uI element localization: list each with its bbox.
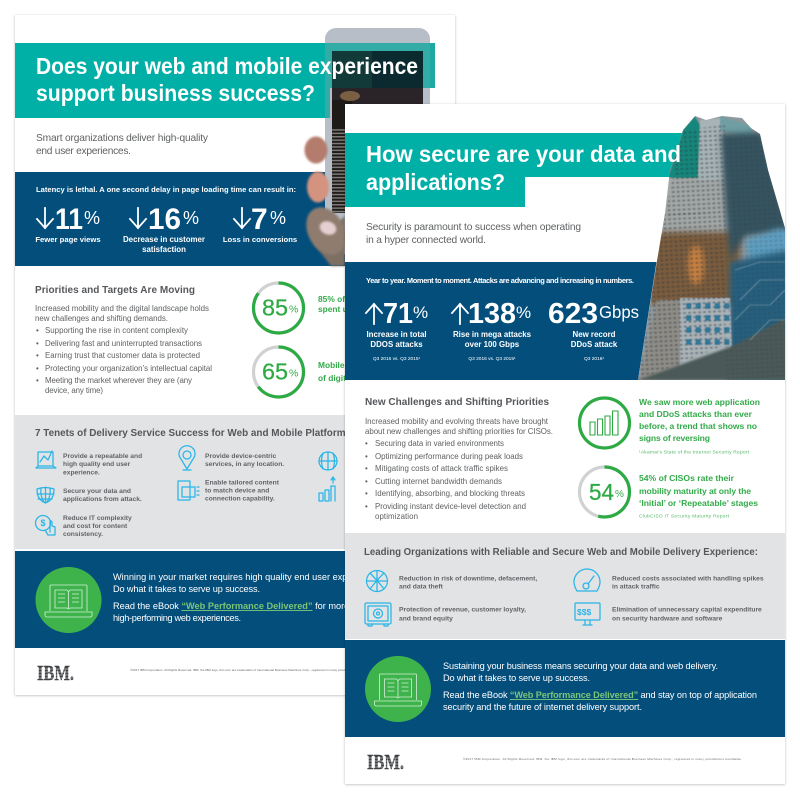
benefit: downtime — [399, 576, 537, 590]
title: Does your web and mobile experience — [36, 53, 418, 79]
stat: 11 percent: Fewer page views — [35, 235, 101, 244]
panel: new challenges: New Challenges and Shifting Priorities — [365, 397, 549, 408]
attack statistics — [366, 276, 639, 362]
priorities body text: Meeting the market wherever they are (any — [45, 376, 192, 385]
priorities body text: new challenges and shifting demands. — [35, 314, 168, 323]
ring captions: 85% of mobile time is — [318, 294, 404, 304]
priorities body text: • — [36, 339, 39, 348]
tenet 1 — [63, 453, 142, 476]
callout: web and DDoS attacks: We saw more web application — [639, 397, 760, 407]
stat: 71 percent: DDOS attacks — [370, 340, 423, 349]
right footer: ©2017 IBM Corporation. All Rights Reserved. IBM, the IBM logo, ibm.com are trademarks of International Business Machines Corp., registered in many jurisdictions worldwide. — [463, 757, 742, 761]
callout: web and DDoS attacks: ¹Akamai’s State of the Internet Security Report — [639, 450, 750, 456]
icon: ebook laptop — [365, 656, 431, 722]
icon: globe devices — [319, 452, 337, 470]
tenet 2: applications from attack. — [63, 496, 142, 503]
icon: speedometer — [574, 569, 600, 591]
challenges body text: Identifying, absorbing, and blocking threats — [375, 489, 525, 498]
icon: dollar hand — [36, 516, 55, 535]
call to action text — [443, 661, 757, 712]
icon: dollar sign: $ — [40, 518, 46, 528]
callout: CISO mobility maturity: ‘Initial’ or ‘Repeatable’ stages — [639, 498, 758, 508]
stat: 7 percent — [223, 203, 297, 244]
challenges body text — [365, 417, 553, 521]
ring: 54 percent: 54 — [589, 479, 614, 505]
priorities body text: Protecting your organization’s intellectual capital — [45, 364, 212, 373]
stat: 623 Gbps: New record — [573, 330, 616, 339]
stat: 16 percent: 16 — [148, 203, 181, 236]
title: support business success? — [36, 80, 315, 106]
ring: 54 percent — [580, 467, 630, 517]
tenet 4 — [205, 453, 284, 468]
stat: 71 percent — [366, 298, 428, 362]
panel: latency statistics — [35, 185, 297, 254]
challenges body text: • — [365, 452, 368, 461]
ring: 65 percent: % — [289, 368, 298, 380]
stat: 623 Gbps: Gbps — [599, 302, 639, 322]
stat: 138 percent: over 100 Gbps — [465, 340, 520, 349]
priorities body text: Increased mobility and the digital landscape holds — [35, 304, 209, 313]
icon: monitor dollars — [575, 603, 600, 625]
challenges body text: • — [365, 439, 368, 448]
callout: web and DDoS attacks — [639, 397, 760, 456]
tenet 2: Secure your data and — [63, 488, 131, 495]
icon: growth bars — [319, 477, 335, 501]
hand holding the phone — [298, 136, 354, 266]
ring: 54 percent: % — [615, 489, 624, 500]
phone photo — [298, 28, 435, 266]
stat: 138 percent: 138 — [468, 298, 516, 330]
tenet 5: connection capability. — [205, 496, 275, 502]
stat: 16 percent: satisfaction — [142, 245, 186, 254]
ring: 85 percent: 85 — [262, 294, 288, 320]
call to action text: Do what it takes to serve up success. — [113, 584, 260, 594]
stat: 623 Gbps — [548, 298, 639, 362]
ring: 65 percent: 65 — [262, 358, 288, 384]
challenges body text: optimization — [375, 512, 418, 521]
callout: CISO mobility maturity: ClubCISO IT Security Maturity Report — [639, 514, 730, 520]
panel: new challenges — [365, 397, 760, 521]
benefit: downtime: Reduction in risk of downtime, defacement, — [399, 576, 537, 582]
tenet 4: Provide device-centric — [205, 453, 277, 460]
title — [36, 53, 418, 106]
benefit: capital expenditure: Elimination of unnecessary capital expenditure — [612, 606, 762, 614]
panel: left infographic page — [15, 15, 455, 695]
challenges body text: Providing instant device-level detection and — [375, 502, 526, 511]
icon: dollar signs: $$$ — [577, 607, 591, 617]
tenet 5 — [205, 480, 280, 502]
intro text — [366, 222, 581, 246]
challenges body text: Optimizing performance during peak loads — [375, 452, 523, 461]
tenet 3: Reduce IT complexity — [63, 515, 132, 522]
benefit: capital expenditure: on security hardware and software — [612, 616, 723, 622]
panel: priorities and targets: Priorities and Targets Are Moving — [35, 285, 195, 296]
tenet 5: Enable tailored content — [205, 480, 280, 486]
call to action text: Sustaining your business means securing your data and web delivery. — [443, 661, 718, 671]
stat: 623 Gbps: DDoS attack — [571, 340, 618, 349]
tenet 3: and cost for content — [63, 523, 128, 530]
latency band background — [15, 172, 345, 266]
building photo — [638, 116, 785, 380]
priorities body text: • — [36, 326, 39, 335]
tenet 1: high quality end user — [63, 461, 131, 468]
stat: 11 percent — [35, 203, 101, 244]
stat: 16 percent — [123, 203, 205, 254]
challenges body text: Mitigating costs of attack traffic spikes — [375, 464, 508, 473]
stat: 623 Gbps: 623 — [548, 298, 598, 330]
tenet 1: experience. — [63, 470, 100, 476]
attack statistics: Year to year. Moment to moment. Attacks are advancing and increasing in numbers. — [366, 276, 634, 285]
priorities body text: • — [36, 364, 39, 373]
stat: 7 percent: % — [270, 208, 286, 228]
challenges body text: Increased mobility and evolving threats have brought — [365, 417, 549, 426]
benefit: costs: Reduced costs associated with handling spikes — [612, 576, 764, 582]
callout: CISO mobility maturity — [639, 473, 758, 520]
left footer: IBM. — [37, 661, 74, 685]
ring: 65 percent — [254, 347, 304, 397]
stat: 71 percent: Q3 2016 vs. Q3 2015¹ — [373, 356, 420, 362]
priorities body text: Earning trust that customer data is protected — [45, 351, 200, 360]
title: applications? — [366, 169, 505, 195]
title band — [15, 43, 435, 118]
challenges body text: • — [365, 477, 368, 486]
title — [366, 141, 681, 195]
ring captions — [318, 294, 404, 383]
panel: latency statistics: Latency is lethal. A one second delay in page loading time can result in: — [36, 185, 296, 194]
stat: 138 percent — [452, 298, 532, 362]
benefit: costs — [612, 576, 764, 590]
left footer — [36, 661, 370, 685]
call to action text — [113, 572, 385, 623]
tenet 3 — [63, 515, 132, 538]
tenet 1: Provide a repeatable and — [63, 453, 142, 460]
stat: 138 percent: % — [516, 303, 531, 322]
stat: 71 percent: Increase in total — [366, 330, 427, 339]
icon: safe — [365, 603, 391, 626]
priorities body text: • — [36, 351, 39, 360]
benefit: capital expenditure — [612, 606, 762, 622]
priorities body text: • — [36, 376, 39, 385]
benefit: downtime: and data theft — [399, 584, 444, 590]
ring captions: of digital time — [318, 373, 373, 383]
icon: laptop chart — [36, 451, 56, 468]
panel: leading organizations: Leading Organizations with Reliable and Secure Web and Mobile Delivery Experience: — [364, 547, 758, 558]
challenges body text: Securing data in varied environments — [375, 439, 504, 448]
title: How secure are your data and — [366, 141, 681, 167]
challenges body text: about new challenges and shifting priorities for CISOs. — [365, 427, 553, 436]
challenges body text: • — [365, 464, 368, 473]
priorities body text — [35, 304, 212, 395]
panel: priorities and targets — [35, 283, 404, 397]
stat: 138 percent: Q3 2016 vs. Q3 2015¹ — [468, 356, 516, 362]
stat: 16 percent: Decrease in customer — [123, 235, 205, 244]
benefit: costs: in attack traffic — [612, 584, 660, 590]
icon: location pin — [179, 446, 195, 470]
callout: CISO mobility maturity: 54% of CISOs rate their — [639, 473, 735, 483]
panel: leading organizations — [345, 533, 785, 639]
callout: web and DDoS attacks: and DDoS attacks than ever — [639, 409, 753, 419]
call to action text: Winning in your market requires high quality end user experiences. — [113, 572, 385, 582]
ring: 85 percent: % — [289, 304, 298, 316]
call to action text: Read the eBook “Web Performance Delivered” for more — [113, 601, 349, 611]
ring: bar chart icon — [580, 398, 630, 448]
title band — [345, 133, 705, 207]
challenges body text: • — [365, 489, 368, 498]
tenet 4: services, in any location. — [205, 461, 284, 468]
priorities body text: Delivering fast and uninterrupted transactions — [45, 339, 202, 348]
intro text: Smart organizations deliver high-quality — [36, 133, 209, 144]
stat: 11 percent: 11 — [55, 203, 83, 236]
ring captions: Mobile now leads — [318, 360, 388, 370]
icon: gear globe — [366, 570, 388, 592]
callout: web and DDoS attacks: before, a trend that shows no — [639, 421, 757, 431]
panel: left call to action — [15, 551, 455, 648]
intro text: in a hyper connected world. — [366, 235, 486, 246]
icon: ebook laptop — [36, 567, 102, 633]
tenet 5: to match device and — [205, 488, 269, 494]
call to action text: high-performing web experiences. — [113, 613, 241, 623]
call to action text: Do what it takes to serve up success. — [443, 673, 590, 683]
left footer: ©2017 IBM Corporation. All Rights Reserved. IBM, the IBM logo, ibm.com are trademarks of International Business Machines Corp., registered in many jurisdictions worldwide. — [130, 668, 370, 672]
panel: attack statistics background — [345, 262, 656, 380]
priorities body text: device, any time) — [45, 386, 103, 395]
panel: right infographic page — [345, 104, 790, 784]
call to action text: Read the eBook “Web Performance Delivered” and stay on top of application — [443, 690, 757, 700]
icon: devices — [178, 481, 199, 500]
priorities body text: Supporting the rise in content complexity — [45, 326, 188, 335]
tenet 3: consistency. — [63, 531, 103, 538]
challenges body text: • — [365, 502, 368, 511]
ring: 85 percent — [254, 283, 304, 333]
stat: 623 Gbps: Q3 2016¹ — [584, 356, 604, 362]
callout: web and DDoS attacks: signs of reversing — [639, 433, 710, 443]
benefit: revenue: Protection of revenue, customer loyalty, — [399, 606, 526, 614]
stat: 16 percent: % — [183, 208, 199, 228]
benefit: revenue: and brand equity — [399, 616, 453, 622]
stat: 11 percent: % — [84, 208, 100, 228]
right footer — [366, 750, 742, 774]
callout: CISO mobility maturity: mobility maturity at only the — [639, 486, 751, 496]
intro text — [36, 133, 209, 157]
stat: 71 percent: 71 — [383, 298, 413, 330]
intro text: Security is paramount to success when operating — [366, 222, 581, 233]
panel: 7 tenets: 7 Tenets of Delivery Service Success for Web and Mobile Platforms — [35, 428, 352, 439]
challenges body text: Cutting internet bandwidth demands — [375, 477, 502, 486]
tenet 2 — [63, 488, 142, 503]
call to action text: security and the future of internet delivery support. — [443, 702, 642, 712]
stat: 138 percent: Rise in mega attacks — [453, 330, 532, 339]
panel: 7 tenets — [15, 415, 455, 549]
intro text: end user experiences. — [36, 146, 131, 157]
stat: 71 percent: % — [413, 303, 428, 322]
stat: 7 percent: Loss in conversions — [223, 235, 297, 244]
right footer: IBM. — [367, 750, 404, 774]
panel: right call to action — [345, 640, 785, 737]
icon: globe shield — [37, 487, 54, 503]
stat: 7 percent: 7 — [251, 203, 268, 236]
ring captions: spent using apps — [318, 304, 387, 314]
benefit: revenue — [399, 606, 526, 622]
